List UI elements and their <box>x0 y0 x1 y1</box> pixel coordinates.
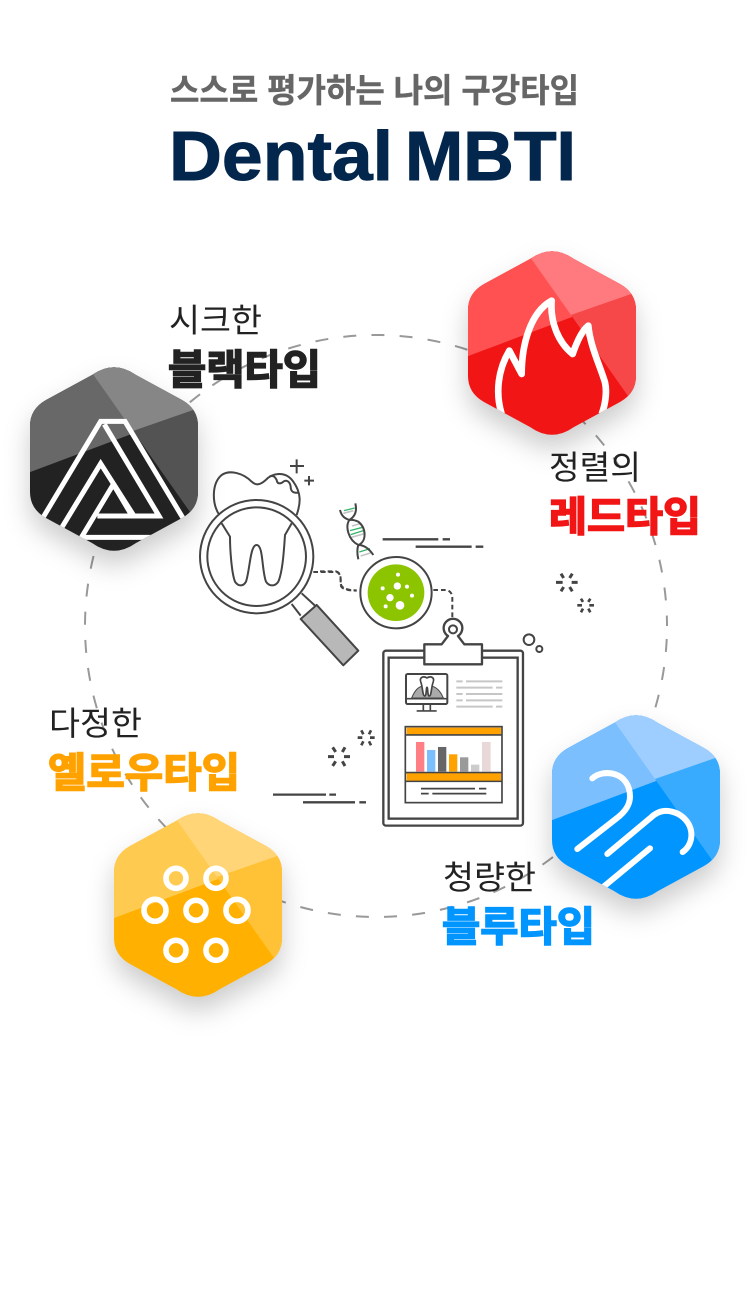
hexagon badge: yellow <box>109 802 287 1008</box>
icon: DNA helix <box>340 503 373 559</box>
label: yellow type: 다정한 <box>49 705 142 742</box>
decorative lines: upper <box>383 539 483 547</box>
hexagon badge: black <box>25 356 203 562</box>
bar chart <box>405 727 502 803</box>
label: red type: 정렬의 <box>549 449 641 486</box>
title: subtitle: 스스로 평가하는 나의 구강타입 <box>170 72 579 109</box>
icon: nested triangle <box>43 421 183 539</box>
icon: sparkles left <box>328 730 375 766</box>
title: Dental MBTI <box>169 117 576 195</box>
label: red type: 레드타입 <box>549 494 701 540</box>
dashed orbit circle <box>85 335 667 917</box>
icon: flame <box>498 301 606 414</box>
title: Dental MBTI: MBTI <box>405 117 576 195</box>
label: black type: 시크한 <box>169 302 262 339</box>
hexagon badge: blue <box>547 704 725 910</box>
clipboard <box>383 619 523 826</box>
label: red type <box>549 449 701 540</box>
label: blue type <box>442 859 595 950</box>
label: blue type: 블루타입 <box>442 904 595 950</box>
icon: petri dish <box>360 557 432 628</box>
decorative lines: lower <box>273 795 366 802</box>
label: blue type: 청량한 <box>443 859 536 896</box>
icon: wind <box>577 773 691 888</box>
label: yellow type <box>48 705 240 796</box>
icon: ring dots <box>144 868 248 960</box>
label: yellow type: 옐로우타입 <box>48 750 240 796</box>
hexagon badge: red <box>463 240 641 446</box>
icon: sparkles right <box>556 574 594 612</box>
label: black type <box>168 302 321 393</box>
dashed connectors <box>320 571 452 620</box>
icon: bubbles <box>524 634 542 652</box>
label: black type: 블랙타입 <box>168 347 321 393</box>
central illustration: DNA, petri dish, clipboard report <box>273 503 594 826</box>
clip <box>424 619 482 664</box>
report text lines <box>456 681 502 707</box>
monitor with tooth <box>406 674 447 711</box>
central illustration: magnifier and tooth <box>200 459 358 665</box>
title: Dental MBTI: Dental <box>169 117 393 195</box>
